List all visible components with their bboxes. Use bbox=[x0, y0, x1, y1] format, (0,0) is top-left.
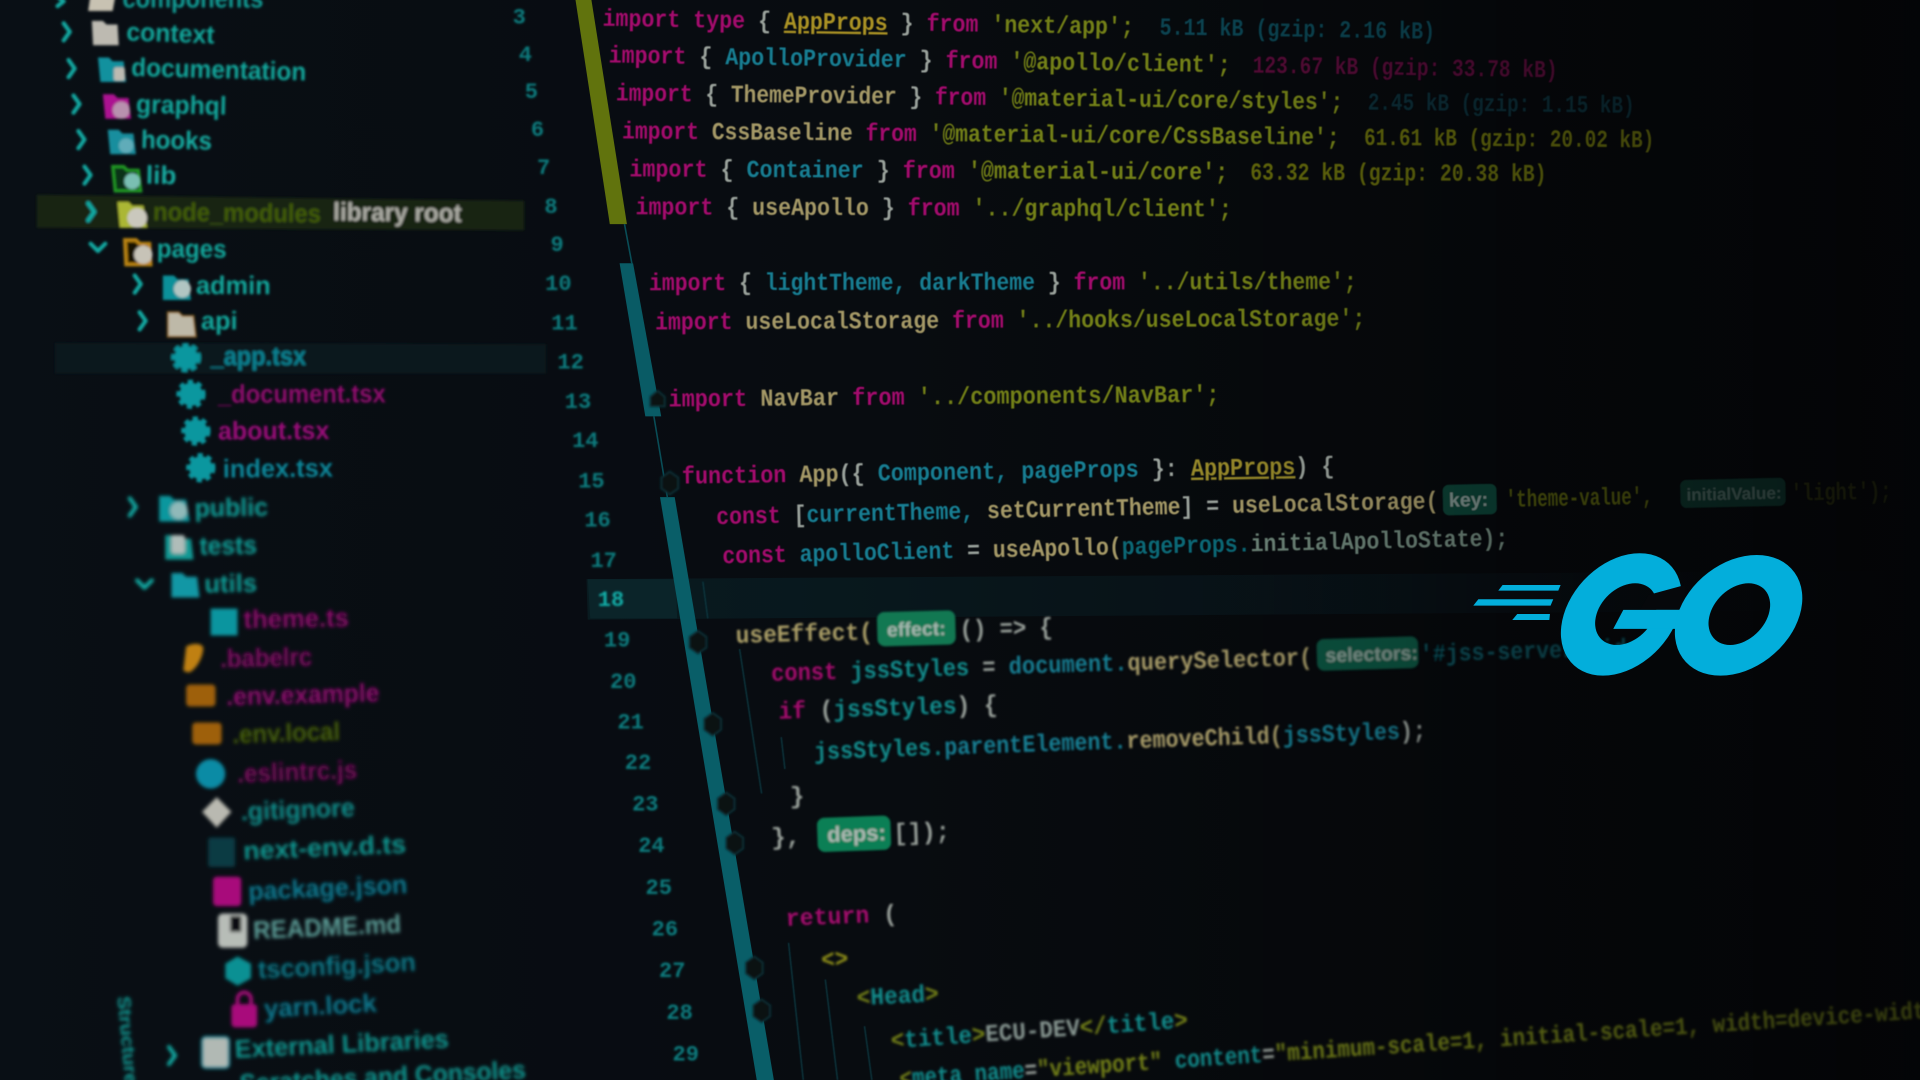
code line 5: import { ThemeProvider } from '@material-ui/core/styles'; bbox=[616, 81, 1343, 117]
tree row: .babelrc bbox=[183, 643, 312, 673]
tree row: External Libraries: External Libraries bbox=[234, 1026, 449, 1064]
line numbers: 26 bbox=[652, 918, 678, 943]
line numbers: 16 bbox=[584, 509, 611, 534]
line numbers: 4 bbox=[519, 43, 532, 68]
code line 19 bbox=[735, 616, 1053, 651]
parameter hint: effect: effect: bbox=[887, 618, 946, 641]
tree row: .env.local: .env.local bbox=[232, 718, 341, 749]
olive change bar bbox=[576, 0, 627, 224]
tree row: graphql bbox=[73, 91, 227, 121]
line numbers: 19 bbox=[604, 629, 630, 654]
parameter hint: deps: deps: bbox=[827, 820, 886, 847]
letter O bbox=[1659, 555, 1818, 676]
line numbers: 28 bbox=[666, 1001, 693, 1026]
tree row: next-env.d.ts: next-env.d.ts bbox=[243, 831, 407, 866]
panel: file tree sidebar lower bbox=[114, 494, 526, 1080]
tree row: index.tsx: index.tsx bbox=[223, 455, 334, 484]
tree row: graphql: graphql bbox=[136, 91, 227, 121]
line numbers: 18 bbox=[598, 588, 624, 613]
parameter hint: effect bbox=[877, 610, 956, 647]
parameter hint: initialValue bbox=[1680, 478, 1786, 508]
line numbers: 9 bbox=[551, 233, 564, 258]
speed lines bbox=[1473, 585, 1561, 620]
tree row: admin: admin bbox=[196, 272, 271, 300]
tree row: utils: utils bbox=[204, 570, 257, 599]
code line 24: }, bbox=[771, 825, 801, 853]
line numbers: 22 bbox=[625, 751, 651, 776]
code line 21: if (jssStyles) { bbox=[778, 693, 998, 727]
line numbers: 3 bbox=[513, 5, 526, 30]
tree row: .env.example: .env.example bbox=[226, 679, 380, 711]
tree row: .eslintrc.js: .eslintrc.js bbox=[237, 756, 358, 788]
panel: code editor, useEffect block bbox=[735, 610, 1653, 934]
gutter change bars bbox=[576, 0, 774, 1080]
tree row: node_modules library root: library root bbox=[333, 198, 462, 228]
tree row: hooks bbox=[78, 126, 212, 156]
tree row: _app.tsx bbox=[174, 343, 307, 371]
logo: Go bbox=[1473, 553, 1818, 676]
code line 22: jssStyles.parentElement.removeChild(jssStyles); bbox=[814, 719, 1426, 767]
line numbers: 14 bbox=[572, 429, 599, 454]
tree row: utils bbox=[137, 570, 257, 599]
tree row: hooks: hooks bbox=[141, 126, 212, 156]
code line 7: 63.32 kB (gzip: 20.38 kB) bbox=[1250, 161, 1547, 189]
tree row: yarn.lock bbox=[231, 990, 378, 1027]
parameter hint: key: key: bbox=[1449, 489, 1488, 512]
line numbers: 27 bbox=[659, 959, 685, 984]
tree row: theme.ts: theme.ts bbox=[243, 604, 349, 634]
code line 16: 'theme-value', bbox=[1506, 485, 1653, 515]
panel: code editor, JSX block bbox=[821, 947, 1920, 1080]
line numbers: 23 bbox=[632, 793, 659, 818]
tree row: pages bbox=[91, 235, 227, 264]
code line 16 bbox=[716, 479, 1892, 532]
code line 16: 'light'); bbox=[1791, 479, 1892, 509]
line numbers: 8 bbox=[544, 195, 558, 220]
tree row: node_modules library root bbox=[88, 198, 462, 228]
parameter hint: selectors: selectors: bbox=[1325, 642, 1418, 667]
tree row: about.tsx: about.tsx bbox=[218, 417, 330, 446]
tree row: node_modules library root: node_modules bbox=[153, 198, 321, 228]
indent guides bbox=[703, 582, 872, 1080]
code line 23: } bbox=[790, 784, 804, 811]
fold markers bbox=[650, 391, 770, 1022]
code line 28: <Head> bbox=[856, 982, 939, 1013]
tree row: lib: lib bbox=[146, 162, 177, 190]
tree row: public bbox=[130, 494, 268, 523]
tree row: pages: pages bbox=[157, 235, 227, 264]
tree row: .babelrc: .babelrc bbox=[220, 643, 312, 673]
tree row: lib bbox=[84, 162, 177, 191]
tree row: api bbox=[140, 307, 238, 337]
panel: file tree sidebar upper bbox=[37, 0, 546, 484]
line numbers: 10 bbox=[545, 272, 572, 297]
code line 15: function App({ Component, pageProps }: AppProps) { bbox=[682, 454, 1335, 492]
tree row: public: public bbox=[194, 494, 268, 523]
line numbers: 6 bbox=[531, 118, 544, 143]
tree row: package.json: package.json bbox=[248, 871, 408, 906]
tree row: .gitignore: .gitignore bbox=[240, 794, 355, 826]
tree row: components bbox=[58, 0, 263, 13]
current line band: line 18 bbox=[587, 571, 1910, 620]
tree row: External Libraries bbox=[169, 1026, 449, 1068]
thin gutter connector bbox=[624, 224, 667, 497]
tree row: tests: tests bbox=[199, 532, 257, 561]
code line 29: <title>ECU-DEV</title> bbox=[890, 1008, 1189, 1056]
line numbers: 15 bbox=[578, 469, 605, 494]
vertical tab label: Structure: Structure bbox=[114, 995, 142, 1080]
code line 24 bbox=[771, 820, 950, 853]
parameter hint: initialValue: initialValue: bbox=[1686, 483, 1782, 505]
line number 18 highlight bbox=[588, 579, 677, 618]
code line 5: 2.45 kB (gzip: 1.15 kB) bbox=[1368, 91, 1635, 121]
tree row: admin bbox=[135, 272, 271, 300]
code line 19: useEffect( bbox=[735, 620, 873, 651]
tree row: api: api bbox=[201, 307, 238, 336]
code line 24: []); bbox=[893, 820, 950, 849]
code line 19: () => { bbox=[959, 616, 1053, 645]
line numbers: 13 bbox=[565, 390, 591, 415]
line numbers: 17 bbox=[590, 549, 617, 574]
line numbers: 7 bbox=[537, 156, 550, 181]
code line 4: import { ApolloProvider } from '@apollo/client'; bbox=[608, 43, 1231, 80]
line numbers: 21 bbox=[617, 711, 644, 736]
teal change bar lower bbox=[660, 497, 774, 1080]
line numbers: 5 bbox=[525, 80, 538, 105]
right-side darkening bbox=[1200, 0, 1920, 1080]
tree row: documentation: documentation bbox=[131, 54, 307, 86]
code line 4 bbox=[608, 43, 1558, 85]
line numbers: 11 bbox=[551, 311, 578, 336]
tree row: tsconfig.json: tsconfig.json bbox=[257, 949, 416, 984]
line numbers: 20 bbox=[610, 670, 636, 695]
code line 7: import { Container } from '@material-ui/core'; bbox=[629, 157, 1228, 187]
teal change bar upper bbox=[620, 263, 661, 416]
parameter hint: key bbox=[1442, 484, 1497, 516]
code line 6: 61.61 kB (gzip: 20.02 kB) bbox=[1364, 126, 1654, 155]
code line 13: import NavBar from '../components/NavBar'; bbox=[668, 383, 1220, 415]
tree row: README.md: README.md bbox=[252, 910, 402, 945]
tree row: context bbox=[64, 18, 215, 49]
code line 4: 123.67 kB (gzip: 33.78 kB) bbox=[1252, 54, 1558, 85]
code line 3: 5.11 kB (gzip: 2.16 kB) bbox=[1159, 15, 1435, 47]
parameter hint: selectors bbox=[1316, 636, 1419, 671]
code line 26: return ( bbox=[785, 902, 898, 934]
node_modules row highlight bbox=[37, 195, 524, 230]
code line 8: import { useApollo } from '../graphql/client'; bbox=[635, 195, 1232, 224]
code line 20: '#jss-server-side' bbox=[1420, 636, 1653, 670]
code line 7 bbox=[629, 157, 1547, 189]
line numbers: 24 bbox=[638, 834, 665, 859]
code line 11: import useLocalStorage from '../hooks/useLocalStorage'; bbox=[655, 307, 1365, 337]
code line 6: import CssBaseline from '@material-ui/core/CssBaseline'; bbox=[622, 119, 1340, 153]
tree row: tests bbox=[165, 532, 257, 561]
code line 3: import type { AppProps } from 'next/app'; bbox=[602, 7, 1134, 42]
code line 27: <> bbox=[821, 947, 849, 975]
code line 20: const jssStyles = document.querySelector( bbox=[771, 646, 1313, 689]
code line 10: import { lightTheme, darkTheme } from '../utils/theme'; bbox=[649, 270, 1357, 298]
parameter hint: deps bbox=[817, 815, 891, 852]
panel: code editor, import block bbox=[602, 7, 1892, 571]
tree row: _document.tsx: _document.tsx bbox=[217, 380, 386, 409]
selected row highlight bbox=[55, 343, 546, 373]
tree row: .env.local bbox=[192, 718, 341, 749]
letter G bbox=[1545, 553, 1697, 676]
tree row: context: context bbox=[126, 18, 215, 49]
line numbers: 25 bbox=[646, 876, 672, 901]
code line 17: const apolloClient = useApollo(pageProps.initialApolloState); bbox=[722, 526, 1509, 571]
code line 16: const [currentTheme, setCurrentTheme] = useLocalStorage( bbox=[716, 489, 1439, 532]
code line 3 bbox=[602, 7, 1435, 47]
tree row: yarn.lock: yarn.lock bbox=[263, 990, 378, 1024]
tree row: _app.tsx: _app.tsx bbox=[210, 343, 307, 371]
line numbers: 29 bbox=[672, 1042, 699, 1067]
line numbers: 12 bbox=[557, 351, 584, 376]
line numbers bbox=[513, 5, 699, 1067]
code line 20 bbox=[771, 636, 1653, 689]
